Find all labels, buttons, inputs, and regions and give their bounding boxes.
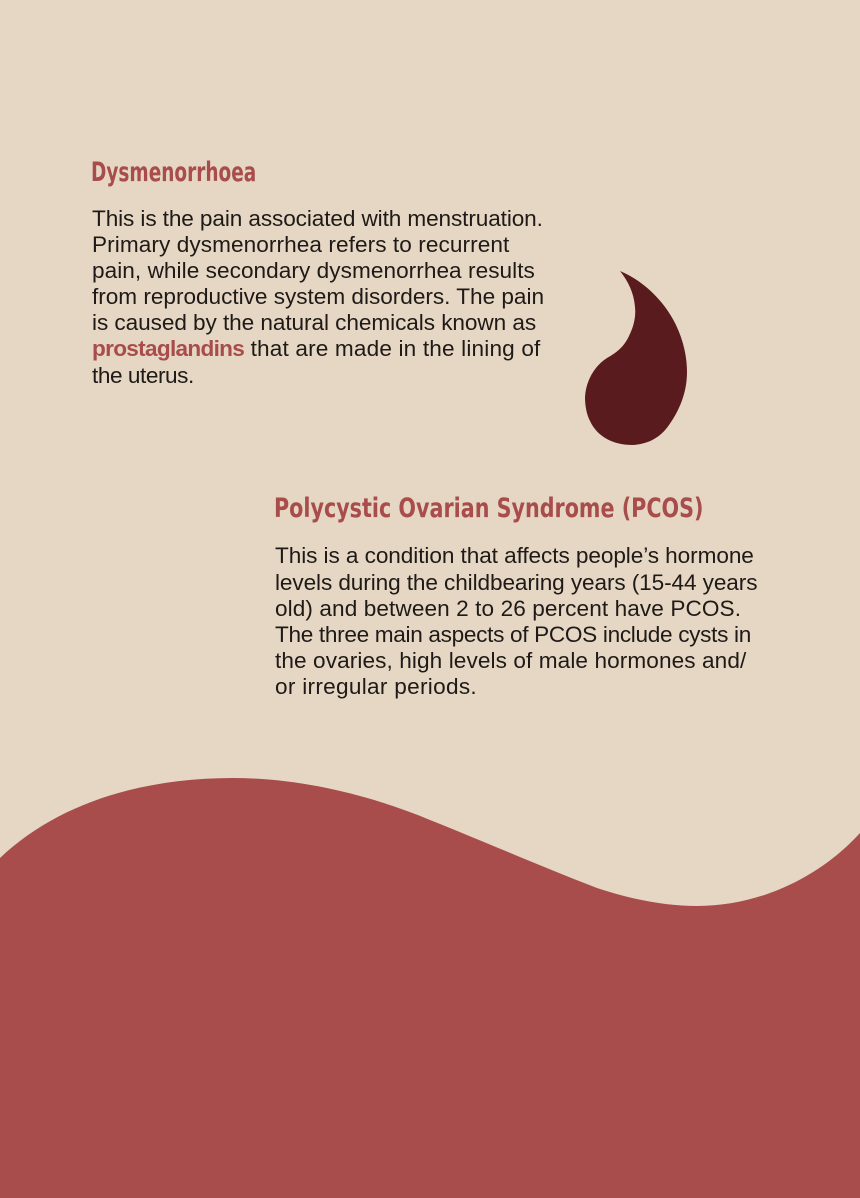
text block: dysmenorrhoea description: Primary dysmenorrhea refers to recurrent [92,232,509,257]
text block: dysmenorrhoea description: is caused by the natural chemicals known as [92,310,536,335]
text block: PCOS description: or irregular periods. [275,674,477,699]
bottom wave panel [0,778,860,1198]
text block: dysmenorrhoea description: pain, while secondary dysmenorrhea results [92,258,535,283]
text block: dysmenorrhoea description: prostaglandins that are made in the lining of [92,336,540,361]
icon: blood drop [585,271,687,445]
text block: PCOS description: The three main aspects of PCOS include cysts in [275,622,751,647]
text block: PCOS description: old) and between 2 to 26 percent have PCOS. [275,596,741,621]
text block: dysmenorrhoea description: from reproductive system disorders. The pain [92,284,544,309]
text block: PCOS description: This is a condition that affects people’s hormone [275,543,754,568]
text block: PCOS description [275,543,757,699]
text block: dysmenorrhoea description [92,206,544,388]
text block: PCOS description: the ovaries, high levels of male hormones and/ [275,648,746,673]
heading: Dysmenorrhoea: Dysmenorrhoea [91,157,256,188]
text block: dysmenorrhoea description: the uterus. [92,363,194,388]
heading: Polycystic Ovarian Syndrome: Polycystic Ovarian Syndrome (PCOS) [274,493,703,524]
text block: dysmenorrhoea description: This is the pain associated with menstruation. [92,206,543,231]
text block: PCOS description: levels during the childbearing years (15-44 years [275,570,757,595]
